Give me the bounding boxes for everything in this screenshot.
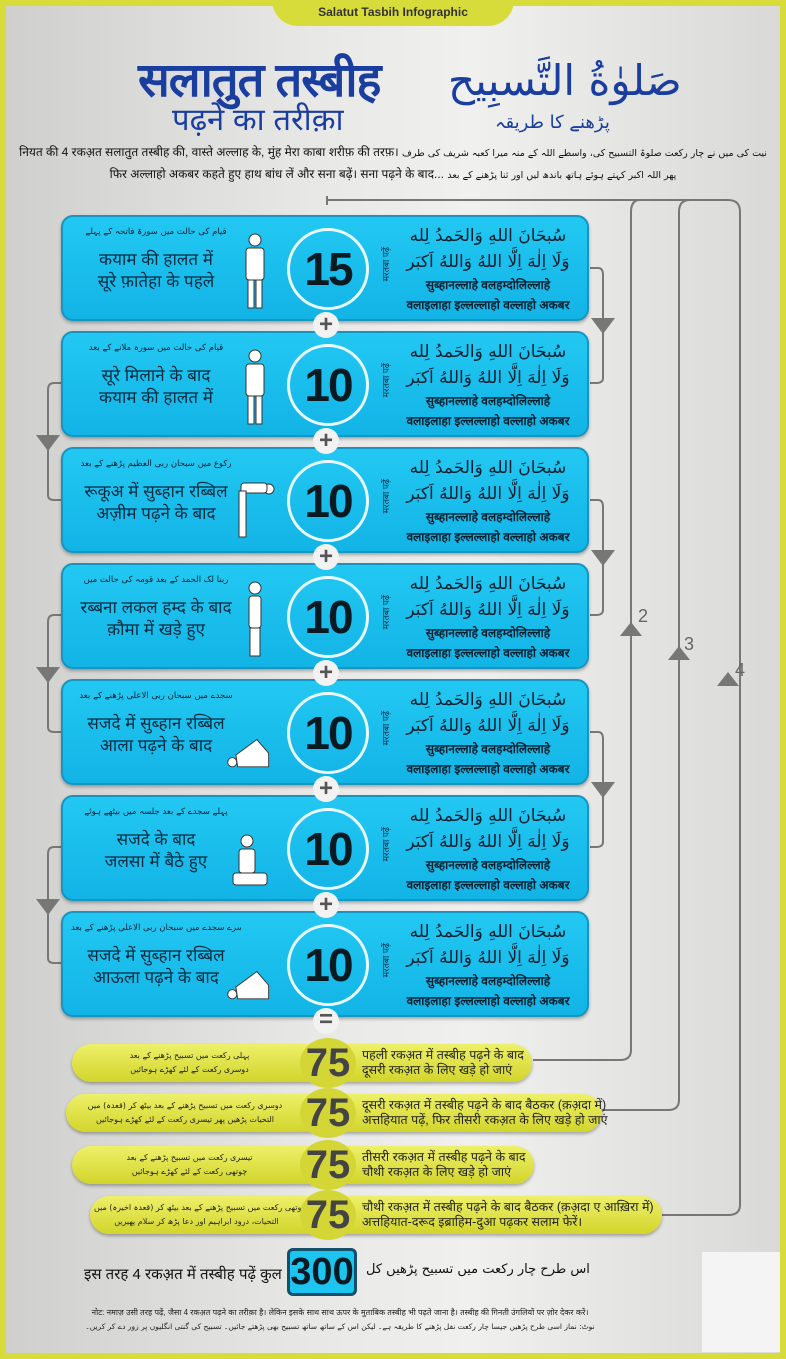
title: پڑھنے کا طریقہ [495, 112, 610, 133]
decorative connectors: 2 [638, 606, 648, 626]
75 row 2: अत्तहियात पढ़ें, फिर तीसरी रकअ़त के लिए खड़े हो जाएं [362, 1113, 608, 1127]
75 row 2 [66, 1094, 602, 1132]
card 2: قیام کی حالت میں سورہ ملانے کے بعد [89, 343, 223, 353]
card 2 [61, 331, 589, 437]
card 4: 10 [304, 591, 352, 643]
card 6: सजदे के बाद [117, 830, 195, 849]
top tab [272, 0, 514, 26]
card 2: 10 [304, 359, 352, 411]
footnote: نوٹ: نماز اسی طرح پڑھیں جیسا چار رکعت نفل پڑھنے کا طریقہ ہے۔ لیکن اس کے ساتھ ساتھ تسبیح بھی پڑھتے جائیں۔ تسبیح کی گنتی انگلیوں پر زور دے کر کریں۔ [85, 1322, 595, 1331]
card 1: وَلَا اِلٰهَ اِلَّا اللهُ وَاللهُ اَکبَر [406, 252, 570, 272]
card 4: सुब्हानल्लाहे वलहम्दोलिल्लाहे [426, 626, 550, 640]
75 row 4: چوتھی رکعت میں تسبیح پڑھنے کے بعد بیٹھ کر (قعدہ اخیرہ) میں [94, 1203, 307, 1212]
watermark box [702, 1252, 780, 1352]
75 row 4: अत्तहियात-दरूद इब्राहिम-दुआ पढ़कर सलाम फेरें। [362, 1215, 582, 1229]
card 5 [61, 679, 589, 785]
title: सलातुत तस्बीह [138, 53, 380, 106]
card 4: वलाइलाहा इल्लल्लाहो वल्लाहो अकबर [406, 646, 570, 660]
card 1: سُبحَانَ اللهِ وَالحَمدُ لِله [410, 226, 566, 246]
card 6: जलसा में बैठे हुए [105, 852, 207, 871]
card 1: कयाम की हालत में [99, 250, 213, 269]
card 3: سُبحَانَ اللهِ وَالحَمدُ لِله [410, 458, 566, 478]
75 row 3: چوتھی رکعت کے لئے کھڑے ہوجائیں [132, 1167, 247, 1176]
footnote [85, 1308, 595, 1332]
card 3: अज़ीम पढ़ने के बाद [96, 504, 216, 523]
card 4 [61, 563, 589, 669]
75 row 1 [72, 1044, 532, 1082]
card 7: सुब्हानल्लाहे वलहम्दोलिल्लाहे [426, 974, 550, 988]
card 4: रब्बना लकल हम्द के बाद [80, 598, 232, 617]
title: पढ़ने का तरीक़ा [172, 102, 344, 137]
card 6: پہلے سجدے کے بعد جلسہ میں بیٹھے ہوئے [84, 807, 228, 817]
card 7: سُبحَانَ اللهِ وَالحَمدُ لِله [410, 922, 566, 942]
intro text: नियत की 4 रकअ़त सलातुत तस्बीह की, वास्ते अल्लाह के, मुंह मेरा काबा शरीफ़ की तरफ़। نیت کی میں نے چار رکعت صلوۃ التسبیح کی، واسطے اللہ کے منہ میرا کعبہ شریف کی طرف [19, 145, 767, 159]
card 6: मरतबा पढ़ें [381, 827, 391, 861]
card 5: سُبحَانَ اللهِ وَالحَمدُ لِله [410, 690, 566, 710]
plus: + [319, 311, 333, 338]
card 4: क़ौमा में खड़े हुए [107, 620, 205, 639]
75 row 2: دوسری رکعت میں تسبیح پڑھنے کے بعد بیٹھ کر (قعدہ) میں [88, 1101, 282, 1110]
card 1: वलाइलाहा इल्लल्लाहो वल्लाहो अकबर [406, 298, 570, 312]
card 6: سُبحَانَ اللهِ وَالحَمدُ لِله [410, 806, 566, 826]
card 1: मरतबा पढ़ें [381, 247, 391, 281]
plus: + [319, 543, 333, 570]
decorative connectors: 3 [684, 634, 694, 654]
text: 75 [306, 1091, 350, 1135]
card 7: وَلَا اِلٰهَ اِلَّا اللهُ وَاللهُ اَکبَر [406, 948, 570, 968]
plus [313, 660, 339, 686]
card 5: 10 [304, 707, 352, 759]
card 3: सुब्हानल्लाहे वलहम्दोलिल्लाहे [426, 510, 550, 524]
card 5: وَلَا اِلٰهَ اِلَّا اللهُ وَاللهُ اَکبَر [406, 716, 570, 736]
card 6: 10 [304, 823, 352, 875]
card 7: 10 [304, 939, 352, 991]
title: صَلوٰةُ التَّسبِیح [448, 56, 682, 105]
card 7: मरतबा पढ़ें [381, 943, 391, 977]
card 6: वलाइलाहा इल्लल्लाहो वल्लाहो अकबर [406, 878, 570, 892]
plus [313, 428, 339, 454]
equals: = [319, 1006, 333, 1033]
75 row 4: चौथी रकअ़त में तस्बीह पढ़ने के बाद बैठकर (क़अ़दा ए आख़िरा में) [362, 1200, 654, 1214]
card 2: वलाइलाहा इल्लल्लाहो वल्लाहो अकबर [406, 414, 570, 428]
total 300: इस तरह 4 रकअ़त में तस्बीह पढ़ें कुल [84, 1266, 282, 1283]
text: 75 [306, 1041, 350, 1085]
75 row 3: चौथी रकअ़त के लिए खड़े हो जाएं [362, 1165, 511, 1179]
card 2: सूरे मिलाने के बाद [102, 366, 210, 385]
card 5: सुब्हानल्लाहे वलहम्दोलिल्लाहे [426, 742, 550, 756]
card 1 [61, 215, 589, 321]
intro text [19, 145, 767, 182]
top tab: Salatut Tasbih Infographic [318, 5, 468, 19]
title [137, 53, 682, 137]
card 3: رکوع میں سبحان ربی العظیم پڑھنے کے بعد [81, 459, 231, 469]
75 row 1: پہلی رکعت میں تسبیح پڑھنے کے بعد [130, 1051, 249, 1060]
equals [313, 1008, 339, 1034]
75 row 2: التحیات پڑھیں پھر تیسری رکعت کے لئے کھڑے ہوجائیں [96, 1115, 274, 1124]
plus: + [319, 775, 333, 802]
card 3 [61, 447, 589, 553]
card 1: सूरे फ़ातेहा के पहले [98, 272, 214, 291]
75 row 1: पहली रकअ़त में तस्बीह पढ़ने के बाद [362, 1048, 524, 1062]
card 5: वलाइलाहा इल्लल्लाहो वल्लाहो अकबर [406, 762, 570, 776]
card 2: कयाम की हालत में [99, 388, 213, 407]
75 row 2: दूसरी रकअ़त में तस्बीह पढ़ने के बाद बैठकर (क़अ़दा में) [362, 1098, 606, 1112]
text: 75 [306, 1143, 350, 1187]
75 row 4 [90, 1196, 662, 1234]
card 5: मरतबा पढ़ें [381, 711, 391, 745]
intro text: फिर अल्लाहो अकबर कहते हुए हाथ बांध लें और सना बढ़ें। सना पढ़ने के बाद... پھر اللہ اکبر کہتے ہوئے ہاتھ باندھ لیں اور ثنا پڑھنے کے بعد [110, 167, 676, 181]
total 300: اس طرح چار رکعت میں تسبیح پڑھیں کل [366, 1262, 590, 1277]
card 3: वलाइलाहा इल्लल्लाहो वल्लाहो अकबर [406, 530, 570, 544]
75 row 3: तीसरी रकअ़त में तस्बीह पढ़ने के बाद [362, 1150, 526, 1164]
decorative connectors: 4 [735, 660, 745, 680]
card 2: मरतबा पढ़ें [381, 363, 391, 397]
text: 75 [306, 1193, 350, 1237]
card 3: रूकूअ में सुब्हान रब्बिल [84, 482, 228, 501]
card 2: سُبحَانَ اللهِ وَالحَمدُ لِله [410, 342, 566, 362]
card 4: मरतबा पढ़ें [381, 595, 391, 629]
total 300: 300 [290, 1251, 354, 1293]
card 4: سُبحَانَ اللهِ وَالحَمدُ لِله [410, 574, 566, 594]
card 6 [61, 795, 589, 901]
75 row 1: دوسری رکعت کے لئے کھڑے ہوجائیں [130, 1065, 249, 1074]
footnote: नोट: नमाज़ उसी तरह पढ़ें, जैसा 4 रकअ़त पढ़ने का तरीक़ा है। लेकिन इसके साथ साथ ऊपर के मुताबिक तस्बीह भी पढ़ते जाना है। तस्बीह की गिनती उंगलियों पर ज़ोर देकर करें। [92, 1308, 588, 1317]
plus [313, 312, 339, 338]
card 3: 10 [304, 475, 352, 527]
card 7: सजदे में सुब्हान रब्बिल [87, 946, 225, 965]
card 5: سجدے میں سبحان ربی الاعلی پڑھنے کے بعد [79, 691, 233, 701]
card 4: وَلَا اِلٰهَ اِلَّا اللهُ وَاللهُ اَکبَر [406, 600, 570, 620]
plus [313, 776, 339, 802]
card 7: वलाइलाहा इल्लल्लाहो वल्लाहो अकबर [406, 994, 570, 1008]
total 300 [84, 1248, 590, 1296]
card 5: आला पढ़ने के बाद [100, 736, 212, 755]
plus: + [319, 659, 333, 686]
plus [313, 892, 339, 918]
card 2: सुब्हानल्लाहे वलहम्दोलिल्लाहे [426, 394, 550, 408]
card 1: सुब्हानल्लाहे वलहम्दोलिल्लाहे [426, 278, 550, 292]
card 1: 15 [304, 243, 352, 295]
75 row 4: التحیات، درود ابراہیم اور دعا پڑھ کر سلام پھیریں [114, 1217, 279, 1226]
card 7 [61, 911, 589, 1017]
card 1: قیام کی حالت میں سورۃ فاتحہ کے پہلے [85, 227, 227, 237]
card 3: मरतबा पढ़ें [381, 479, 391, 513]
card 4: ربنا لک الحمد کے بعد قومہ کی حالت میں [84, 575, 228, 585]
75 row 3 [72, 1146, 534, 1184]
card 6: وَلَا اِلٰهَ اِلَّا اللهُ وَاللهُ اَکبَر [406, 832, 570, 852]
75 row 1: दूसरी रकअ़त के लिए खड़े हो जाएं [362, 1063, 512, 1077]
card 7: आऊला पढ़ने के बाद [93, 968, 219, 987]
plus: + [319, 427, 333, 454]
plus [313, 544, 339, 570]
card 6: सुब्हानल्लाहे वलहम्दोलिल्लाहे [426, 858, 550, 872]
card 5: सजदे में सुब्हान रब्बिल [87, 714, 225, 733]
card 2: وَلَا اِلٰهَ اِلَّا اللهُ وَاللهُ اَکبَر [406, 368, 570, 388]
75 row 3: تیسری رکعت میں تسبیح پڑھنے کے بعد [126, 1153, 252, 1162]
plus: + [319, 891, 333, 918]
card 3: وَلَا اِلٰهَ اِلَّا اللهُ وَاللهُ اَکبَر [406, 484, 570, 504]
